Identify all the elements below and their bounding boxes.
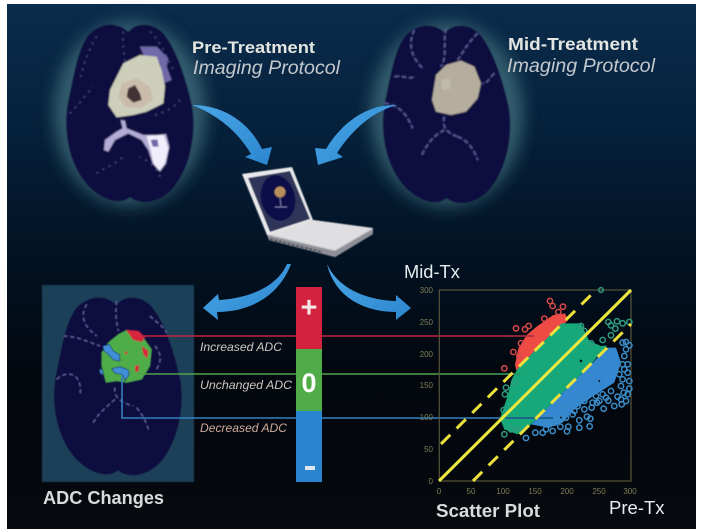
- x axis tick labels: [437, 487, 637, 496]
- label: increased ADC: Increased ADC: [200, 340, 282, 354]
- label: scatter plot: Scatter Plot: [436, 500, 540, 521]
- plus sign: +: [301, 292, 317, 324]
- y axis tick labels: [420, 286, 434, 486]
- x axis tick labels: 0: [437, 487, 442, 496]
- minus sign: [305, 466, 315, 470]
- arrow: mid-treatment to laptop: [315, 105, 397, 165]
- label: unchanged ADC: Unchanged ADC: [200, 378, 292, 392]
- blue points: decreased: [523, 339, 632, 441]
- x axis tick labels: 250: [592, 487, 606, 496]
- green points: unchanged: [500, 288, 632, 437]
- y axis tick labels: 250: [420, 318, 434, 327]
- label: ADC changes: ADC Changes: [43, 488, 164, 508]
- x axis tick labels: 300: [623, 487, 637, 496]
- ADC overlay: increased (red): [125, 330, 148, 372]
- y axis tick labels: 200: [420, 350, 434, 359]
- x axis tick labels: 100: [496, 487, 510, 496]
- upper threshold dashed line: [441, 289, 597, 444]
- connector lines: increased, unchanged, decreased: [122, 336, 553, 418]
- label: decreased ADC: Decreased ADC: [200, 421, 287, 435]
- label: pre-treatment imaging protocol: Imaging Protocol: [193, 57, 341, 79]
- x axis tick labels: 150: [528, 487, 542, 496]
- arrow: laptop to ADC map: [203, 264, 291, 320]
- label: pre-treatment imaging protocol: Pre-Treatment: [192, 38, 315, 57]
- ADC overlay: unchanged (green): [102, 330, 152, 383]
- data points: [500, 288, 632, 441]
- ADC overlay: decreased (blue): [99, 344, 129, 381]
- zero sign: 0: [301, 368, 317, 398]
- lower threshold dashed line: [473, 324, 631, 481]
- label: mid-treatment imaging protocol: Imaging Protocol: [507, 55, 656, 77]
- x axis tick labels: 200: [560, 487, 574, 496]
- scatter continuation of connector lines: [502, 335, 534, 337]
- icon: laptop: [242, 167, 373, 257]
- label: Mid-Tx axis: Mid-Tx: [404, 261, 460, 282]
- y axis tick labels: 150: [420, 381, 434, 390]
- label: pre-treatment imaging protocol: [192, 38, 341, 79]
- y axis tick labels: 0: [429, 477, 434, 486]
- y axis tick labels: 50: [424, 445, 434, 454]
- label: mid-treatment imaging protocol: [507, 34, 656, 77]
- red points: increased: [502, 298, 568, 371]
- plot frame: [439, 290, 631, 481]
- brain image: mid-treatment: [359, 8, 535, 220]
- arrow: pre-treatment to laptop: [192, 105, 272, 165]
- panel: ADC changes map: [42, 285, 194, 482]
- y axis tick labels: 300: [420, 286, 434, 295]
- label: Pre-Tx axis: Pre-Tx: [609, 497, 665, 518]
- identity line: [439, 290, 631, 481]
- label: mid-treatment imaging protocol: Mid-Treatment: [508, 34, 638, 54]
- brain image: pre-treatment: [42, 7, 218, 219]
- x axis tick labels: 50: [467, 487, 476, 496]
- y axis tick labels: 100: [420, 413, 434, 422]
- scatter plot: [420, 286, 637, 496]
- color bar legend: [296, 287, 322, 482]
- arrow: laptop to scatter plot: [327, 264, 411, 320]
